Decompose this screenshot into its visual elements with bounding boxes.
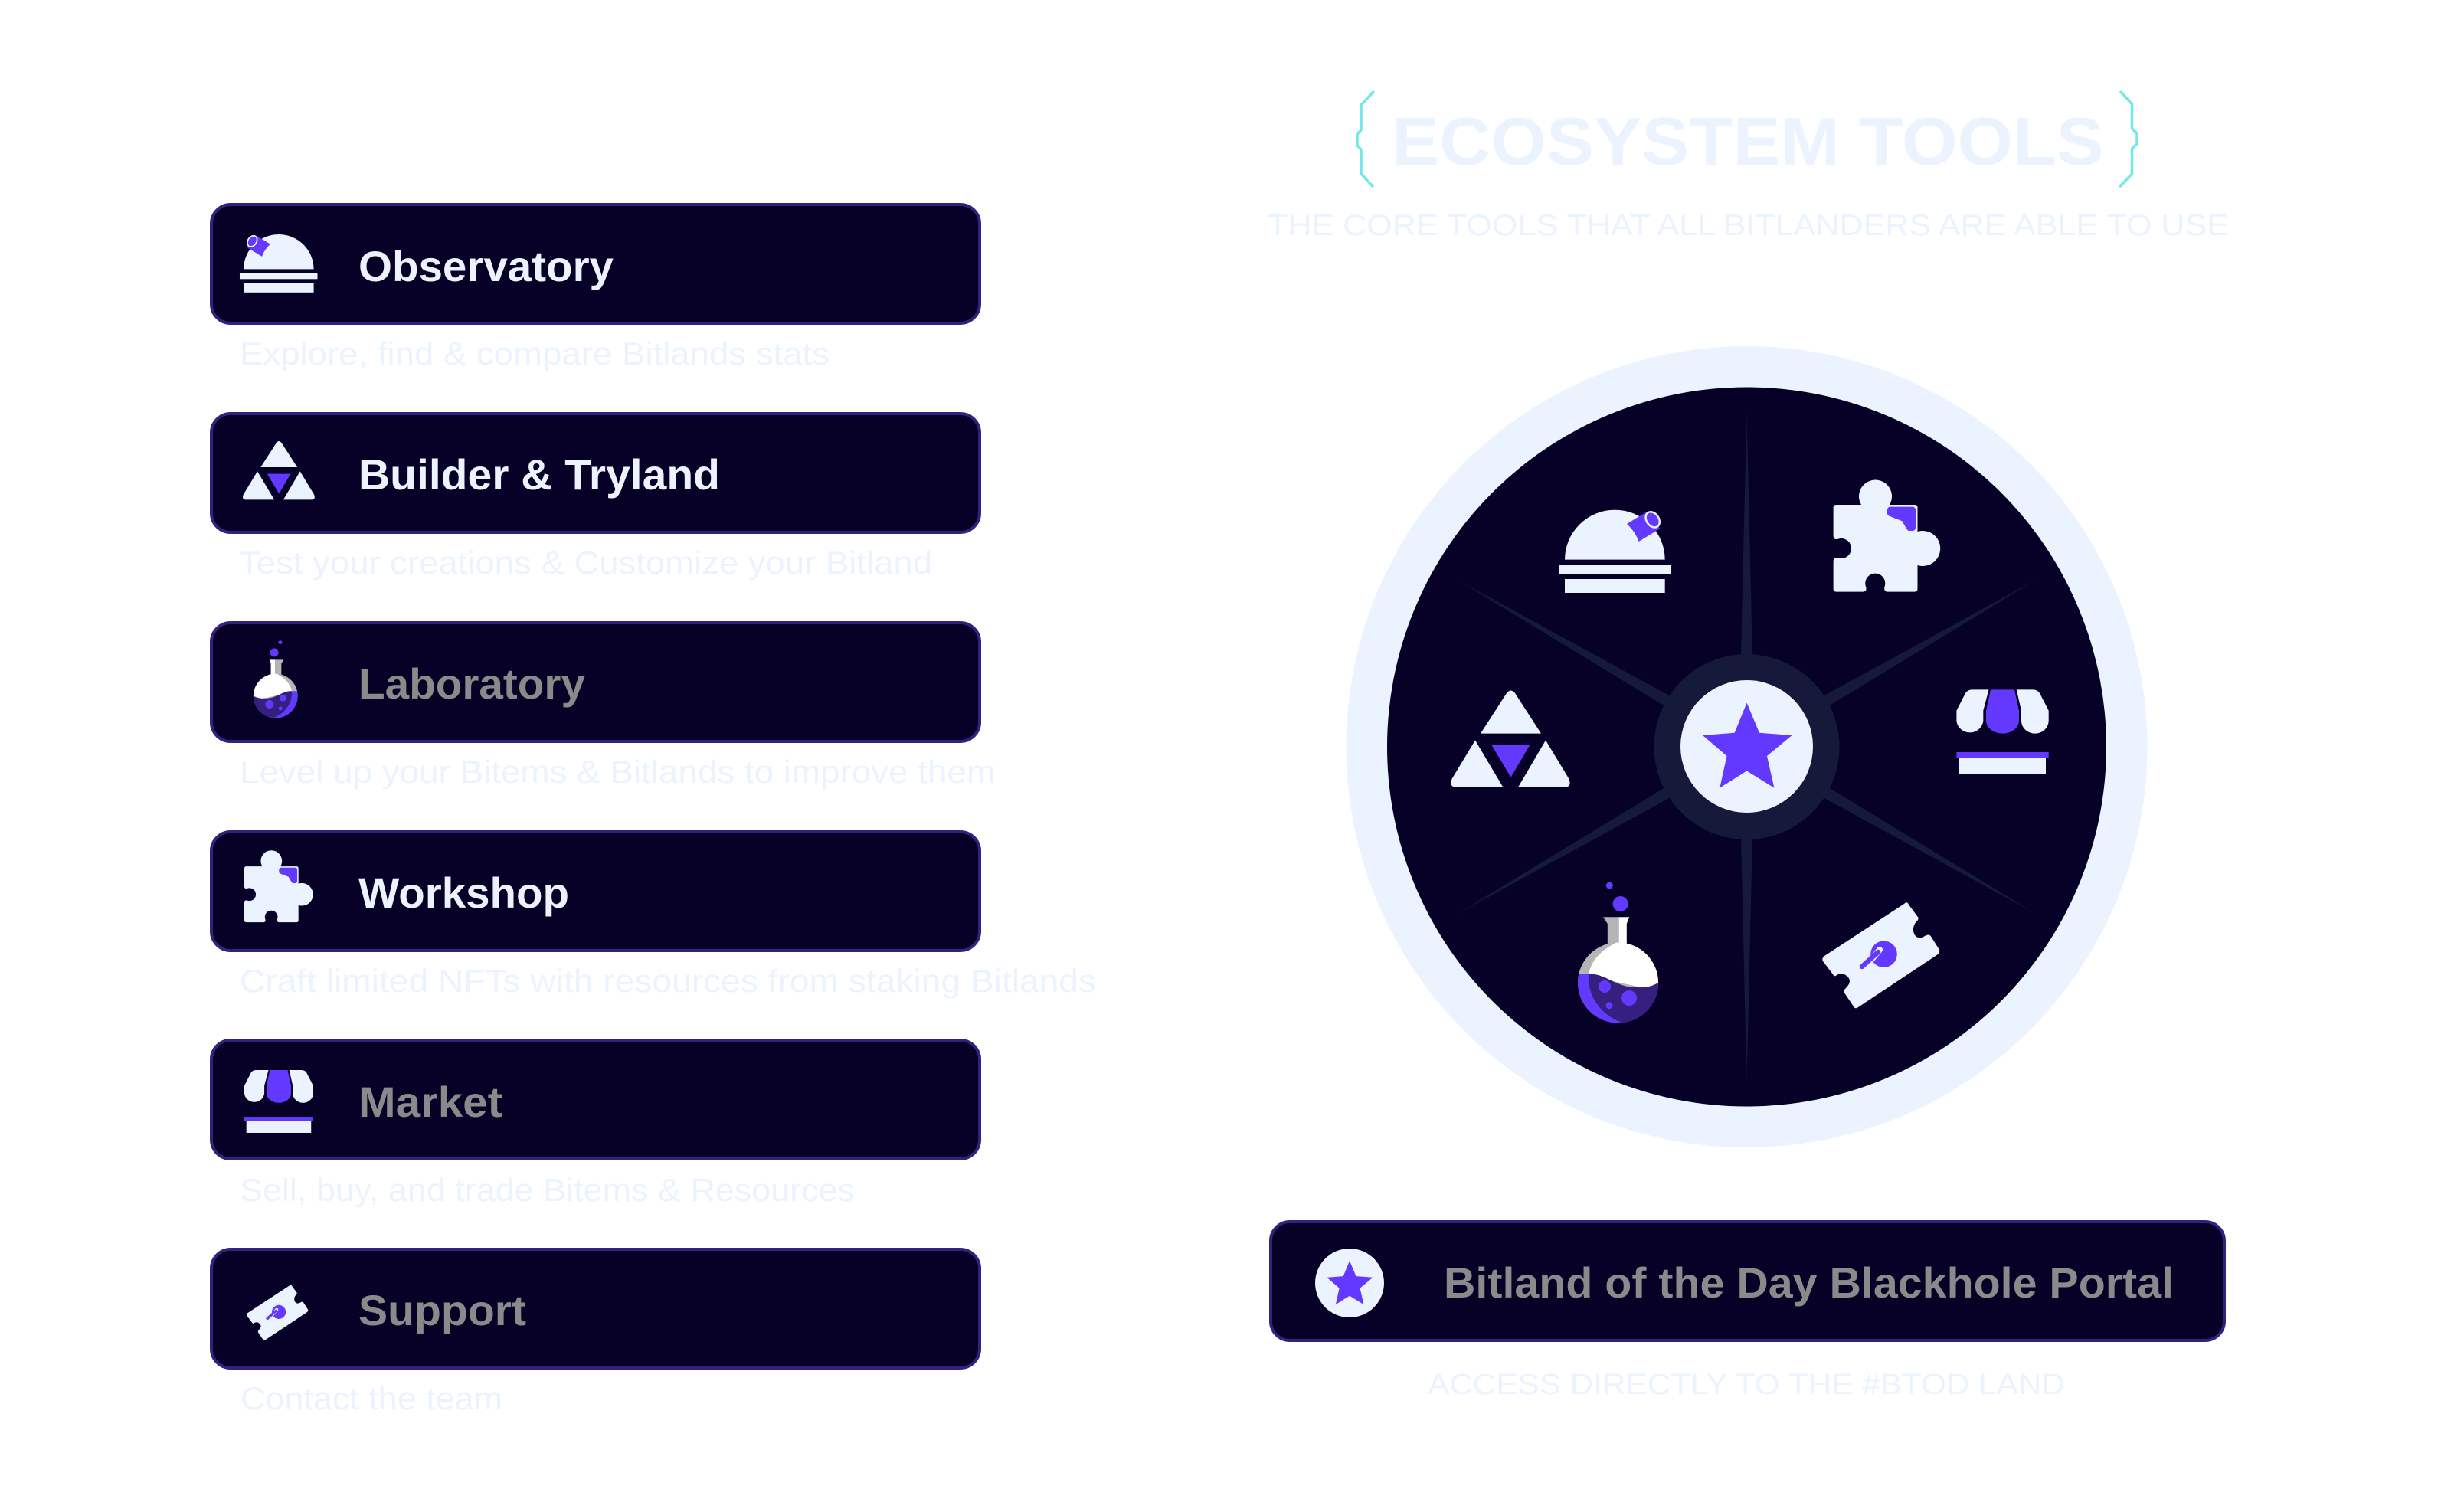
label: Laboratory: Laboratory [358,659,585,708]
center hub with star [1654,654,1840,839]
description: Laboratory: Level up your Bitems & Bitlands to improve them [240,754,996,790]
title: Ecosystem Tools [1357,91,2137,187]
icon: puzzle piece [244,850,313,922]
label: Market: Market [358,1078,502,1126]
wheel spokes [1453,411,2040,1083]
icon: observatory [1559,509,1671,593]
label: Support: Support [358,1286,526,1334]
panel: tools wheel [1347,346,2148,1147]
label: Bitland of the Day Blackhole Portal: Bitland of the Day Blackhole Portal [1444,1258,2174,1307]
icon: puzzle piece [1834,480,1940,592]
panel: Observatory button [211,205,980,323]
description: Builder & Tryland: Test your creations & Customize your Bitland [239,545,932,581]
description: BTOD access: ACCESS DIRECTLY TO THE #BTOD LAND [1428,1369,2065,1401]
label: Workshop: Workshop [358,869,569,917]
description: Workshop: Craft limited NFTs with resources from staking Bitlands [240,963,1096,999]
icon: observatory [240,234,317,293]
subtitle: THE CORE TOOLS THAT ALL BITLANDERS ARE ABLE TO USE [1268,209,2229,242]
icon: flask [251,640,299,720]
icon: triangles [1451,691,1570,787]
label: Builder & Tryland: Builder & Tryland [358,450,720,499]
panel: Support button [211,1249,980,1368]
title bracket: right [2119,91,2137,187]
panel: Bitland of the Day button [1271,1222,2224,1340]
icon: star badge [1315,1249,1384,1317]
panel: Builder & Tryland button [211,414,980,532]
description: Support: Contact the team [241,1380,502,1416]
icon: ticket [247,1285,308,1340]
icon: market stall [1956,689,2049,774]
icon: triangles [243,441,315,499]
panel: Laboratory button [211,623,980,741]
label: Observatory: Observatory [358,242,614,290]
icon: ticket [1822,902,1939,1008]
panel: Market button [211,1040,980,1159]
panel: Workshop button [211,832,980,951]
description: Market: Sell, buy, and trade Bitems & Resources [240,1172,855,1208]
icon: market stall [244,1070,313,1133]
heading text: ECOSYSTEM TOOLS [1392,103,2104,179]
description: Observatory: Explore, find & compare Bitlands stats [240,335,830,371]
title bracket: left [1357,91,1374,187]
icon: flask [1574,882,1662,1026]
